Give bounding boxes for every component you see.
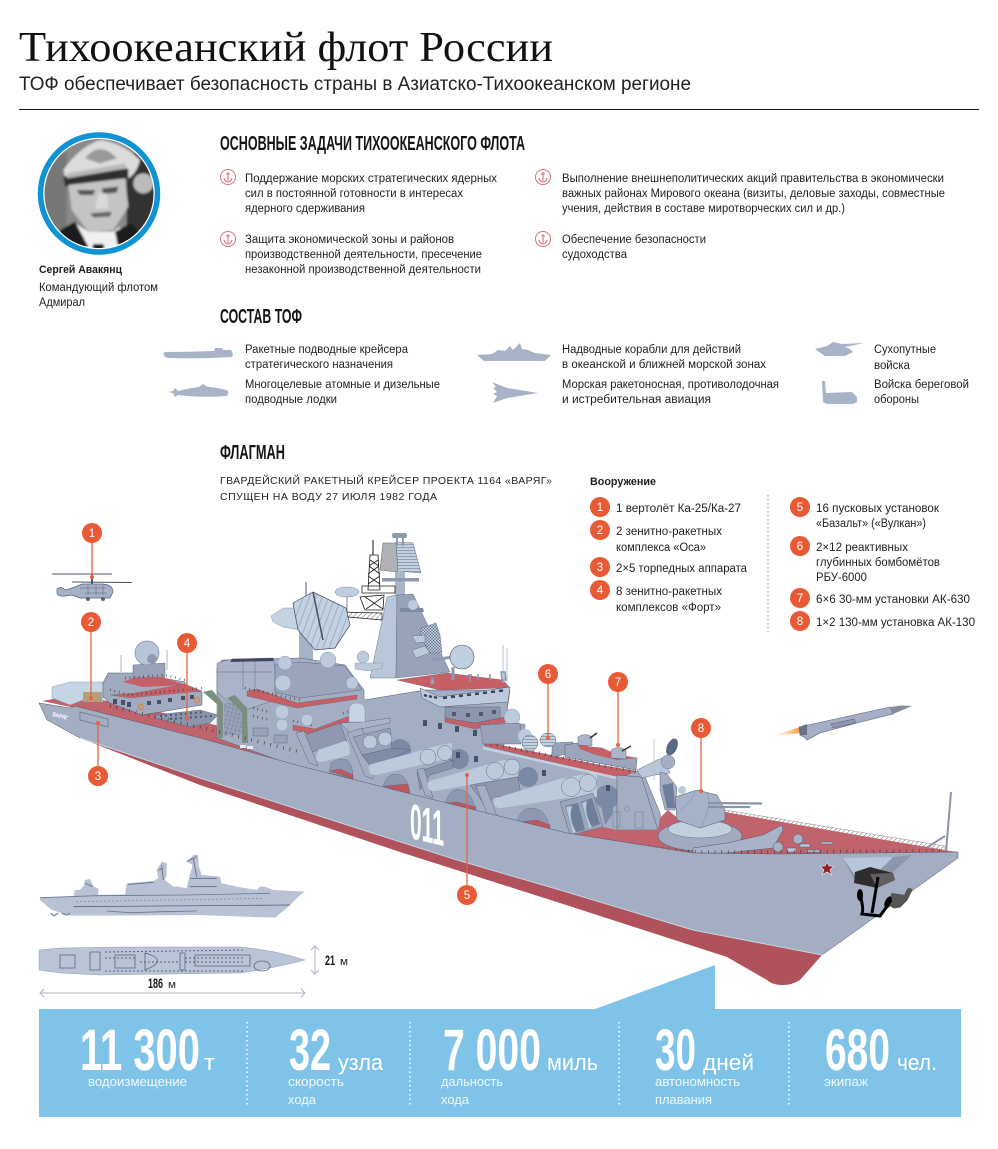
- portrait caption: [39, 264, 158, 309]
- armament item 4: 4: [597, 585, 604, 597]
- stat: range: дальность: [441, 1074, 503, 1089]
- stat: endurance: автономность: [655, 1074, 740, 1089]
- callout 7: [608, 672, 628, 747]
- callout 4: 4: [184, 638, 191, 650]
- missile: [773, 706, 912, 740]
- deck: [42, 695, 958, 855]
- icon: anchor 2: [220, 232, 236, 246]
- stat: speed: скорость: [288, 1074, 344, 1089]
- heading: flagship: ФЛАГМАН: [220, 442, 285, 464]
- task 2: Защита экономической зоны и районов: [245, 234, 454, 246]
- armament item 7: [790, 588, 970, 608]
- task 1: Поддержание морских стратегических ядерных: [245, 173, 497, 185]
- shadow blobs: [389, 739, 619, 825]
- callout 7: 7: [615, 677, 621, 689]
- armament item 6: [790, 536, 940, 584]
- armament item 1: 1: [597, 502, 603, 514]
- icon: tank: [815, 342, 864, 356]
- armament item 8: 8: [797, 616, 803, 628]
- small dish: [335, 587, 359, 597]
- composition item 3: [562, 344, 766, 371]
- armament item 2: 2: [597, 525, 603, 537]
- boot-topping: [80, 738, 822, 985]
- foredeck ramp and fittings: [693, 825, 833, 853]
- armament item 4: [590, 580, 722, 614]
- heading: tasks: ОСНОВНЫЕ ЗАДАЧИ ТИХООКЕАНСКОГО ФЛОТА: [220, 133, 525, 155]
- armament item 5: 5: [797, 502, 803, 514]
- portrait caption: Адмирал: [39, 297, 85, 309]
- armament item 6: глубинных бомбомётов: [816, 557, 940, 569]
- stat: range: [441, 1018, 598, 1107]
- width dimension: м: [340, 956, 348, 968]
- armament item 6: РБУ-6000: [816, 572, 867, 584]
- forward turrets AK-630: [565, 733, 637, 770]
- bow railing: [725, 810, 945, 850]
- callout 8: 8: [698, 723, 704, 735]
- task 4: [562, 234, 706, 261]
- composition item 5: Сухопутные: [874, 344, 936, 356]
- icon: ballistic submarine: [163, 348, 233, 358]
- composition item 3: в океанской и ближней морской зонах: [562, 359, 766, 371]
- flagship description: [220, 474, 552, 503]
- dome on platform: [349, 703, 365, 722]
- forward deck strip: [485, 742, 636, 778]
- ship name: ВАРЯГ: [51, 712, 69, 722]
- task 2: производственной деятельности, пресечение: [245, 249, 482, 261]
- stats panel: [39, 965, 961, 1117]
- flagship cruiser illustration: [39, 533, 958, 985]
- composition item 5: [874, 344, 936, 372]
- callout 1: [82, 523, 102, 579]
- callout 8: [691, 718, 711, 793]
- main superstructure wall: [217, 658, 662, 837]
- stat: endurance: [655, 1018, 754, 1107]
- hull number: 011: [410, 794, 444, 858]
- armament item 3: 3: [597, 562, 603, 574]
- task 3: [562, 173, 945, 215]
- stat: endurance: 30: [655, 1018, 696, 1083]
- composition item 3: Надводные корабли для действий: [562, 344, 741, 356]
- title: Тихоокеанский флот России: [19, 25, 553, 71]
- stat: displacement: т: [204, 1050, 215, 1075]
- armament item 3: [590, 557, 748, 577]
- stat: range: хода: [441, 1092, 470, 1107]
- bridge: [420, 645, 510, 723]
- armament item 6: 2×12 реактивных: [816, 542, 908, 554]
- composition item 4: Морская ракетоносная, противолодочная: [562, 379, 779, 391]
- icon: aircraft: [492, 382, 538, 403]
- task 2: [245, 234, 482, 276]
- armament item 2: 2 зенитно-ракетных: [616, 526, 722, 538]
- length dimension: 186: [148, 975, 163, 991]
- armament item 1: [590, 497, 741, 517]
- launcher supports: [296, 718, 521, 824]
- bow mast: [920, 792, 951, 852]
- heading: composition: СОСТАВ ТОФ: [220, 306, 302, 328]
- composition item 6: обороны: [874, 394, 919, 406]
- stat: range: 7 000: [443, 1018, 541, 1083]
- mesh antenna: [420, 623, 442, 653]
- composition item 5: войска: [874, 360, 911, 372]
- stat: crew: экипаж: [824, 1074, 868, 1089]
- composition item 4: и истребительная авиация: [562, 394, 711, 406]
- callout 5: [457, 773, 477, 905]
- armament item 1: 1 вертолёт Ка-25/Ка-27: [616, 503, 741, 515]
- composition item 4: [562, 379, 779, 406]
- aft block faces: [217, 658, 275, 712]
- light fittings: [240, 745, 253, 749]
- red forward deck: [570, 810, 690, 850]
- Fort launcher: [155, 710, 218, 727]
- callout 3: 3: [95, 771, 101, 783]
- portrait caption: Сергей Авакянц: [39, 264, 122, 276]
- deck railings: [110, 706, 943, 852]
- sail radar: [380, 543, 398, 572]
- callout 3: [88, 721, 108, 786]
- width dimension: [311, 946, 348, 974]
- torpedo hatch: [80, 712, 108, 727]
- icon: anchor 1: [220, 170, 236, 184]
- task 4: Обеспечение безопасности: [562, 234, 706, 246]
- mast tower: [370, 595, 397, 678]
- armament item 8: 1×2 130-мм установка АК-130: [816, 617, 975, 629]
- armament list: [590, 476, 975, 632]
- stat: range: миль: [547, 1050, 598, 1075]
- composition item 6: [874, 379, 969, 406]
- stat: speed: [288, 1018, 384, 1107]
- callout 6: [538, 664, 558, 740]
- icon: coastal defence launcher: [822, 381, 857, 404]
- icon: surface ship: [477, 343, 551, 361]
- flagship description: СПУЩЕН НА ВОДУ 27 ИЮЛЯ 1982 ГОДА: [220, 491, 437, 503]
- top-view ship plan: [39, 947, 305, 975]
- stat: speed: хода: [288, 1092, 317, 1107]
- icon: anchor 4: [536, 232, 550, 246]
- side-view ship profile: [40, 855, 305, 918]
- armament list: Вооружение: [590, 476, 656, 488]
- armament item 4: 8 зенитно-ракетных: [616, 586, 722, 598]
- callout 2: [81, 612, 101, 700]
- aft superstructure: [52, 641, 287, 749]
- composition item 1: [245, 344, 409, 371]
- callout 6: 6: [545, 669, 551, 681]
- porthole windows: [423, 720, 610, 791]
- armament item 7: 7: [797, 593, 803, 605]
- arm: [337, 612, 382, 620]
- domes and fittings: [275, 651, 525, 746]
- arches with red deck: [329, 759, 550, 832]
- star: [820, 862, 834, 875]
- armament item 5: «Базальт» («Вулкан»): [816, 518, 926, 530]
- task 3: учения, действия в составе миротворческих сил и др.): [562, 203, 845, 215]
- forward block: [613, 737, 680, 830]
- composition item 2: Многоцелевые атомные и дизельные: [245, 379, 440, 391]
- length dimension: м: [168, 979, 176, 991]
- forward mast group: [271, 533, 450, 678]
- balcony railings: [245, 688, 365, 726]
- stat: speed: 32: [289, 1018, 331, 1083]
- RBU launchers: [480, 723, 573, 757]
- task 2: незаконной производственной деятельности: [245, 264, 481, 276]
- green masts: [224, 703, 242, 735]
- portrait: Sergey Avakyants: [38, 132, 160, 255]
- stat: endurance: дней: [703, 1050, 754, 1075]
- lattice mast: [360, 540, 395, 610]
- composition item 1: стратегического назначения: [245, 359, 393, 371]
- composition item 1: Ракетные подводные крейсера: [245, 344, 409, 356]
- armament item 7: 6×6 30-мм установки АК-630: [816, 594, 970, 606]
- armament item 4: комплексов «Форт»: [616, 602, 721, 614]
- armament item 8: [790, 611, 975, 631]
- stat: speed: узла: [338, 1050, 384, 1075]
- composition item 2: [245, 379, 440, 406]
- task 3: важных районах Мирового океана (визиты, деловые заходы, совместные: [562, 188, 945, 200]
- icon: helicopter: [52, 574, 132, 601]
- stat: displacement: водоизмещение: [88, 1074, 187, 1089]
- composition item 2: подводные лодки: [245, 394, 337, 406]
- armament item 6: 6: [797, 541, 803, 553]
- armament item 3: 2×5 торпедных аппарата: [616, 563, 748, 575]
- subtitle: ТОФ обеспечивает безопасность страны в Азиатско-Тихоокеанском регионе: [19, 74, 691, 95]
- callout 1: 1: [89, 528, 95, 540]
- twin leg block: [560, 793, 603, 835]
- callout 5: 5: [464, 890, 470, 902]
- callout 4: [177, 633, 197, 721]
- width dimension: 21: [325, 952, 335, 968]
- icon: attack submarine: [168, 384, 228, 397]
- flagship description: ГВАРДЕЙСКИЙ РАКЕТНЫЙ КРЕЙСЕР ПРОЕКТА 1164 «ВАРЯГ»: [220, 474, 552, 487]
- callout 2: 2: [88, 617, 94, 629]
- length dimension: [40, 975, 305, 997]
- icon: anchor 3: [536, 170, 550, 184]
- stat: crew: чел.: [897, 1050, 937, 1075]
- composition item 6: Войска береговой: [874, 379, 969, 391]
- task 1: [245, 173, 497, 215]
- armament item 2: комплекса «Оса»: [616, 542, 706, 554]
- portrait caption: Командующий флотом: [39, 282, 158, 294]
- stat: crew: 680: [825, 1018, 890, 1083]
- main gun AK-130: [658, 786, 762, 851]
- armament item 5: [790, 497, 940, 530]
- task 3: Выполнение внешнеполитических акций правительства в экономически: [562, 173, 944, 185]
- hawse and anchor: [843, 855, 912, 916]
- stat: endurance: плавания: [655, 1092, 712, 1107]
- armament item 5: 16 пусковых установок: [816, 503, 940, 515]
- armament item 2: [590, 520, 722, 554]
- task 1: сил в постоянной готовности в интересах: [245, 188, 463, 200]
- red platforms: [247, 673, 510, 735]
- task 1: ядерного сдерживания: [245, 203, 365, 215]
- large dish radar: [271, 608, 300, 630]
- task 4: судоходства: [562, 249, 628, 261]
- stat: displacement: 11 300: [80, 1018, 200, 1083]
- missile launcher tubes: [316, 732, 597, 808]
- hull: [39, 703, 958, 955]
